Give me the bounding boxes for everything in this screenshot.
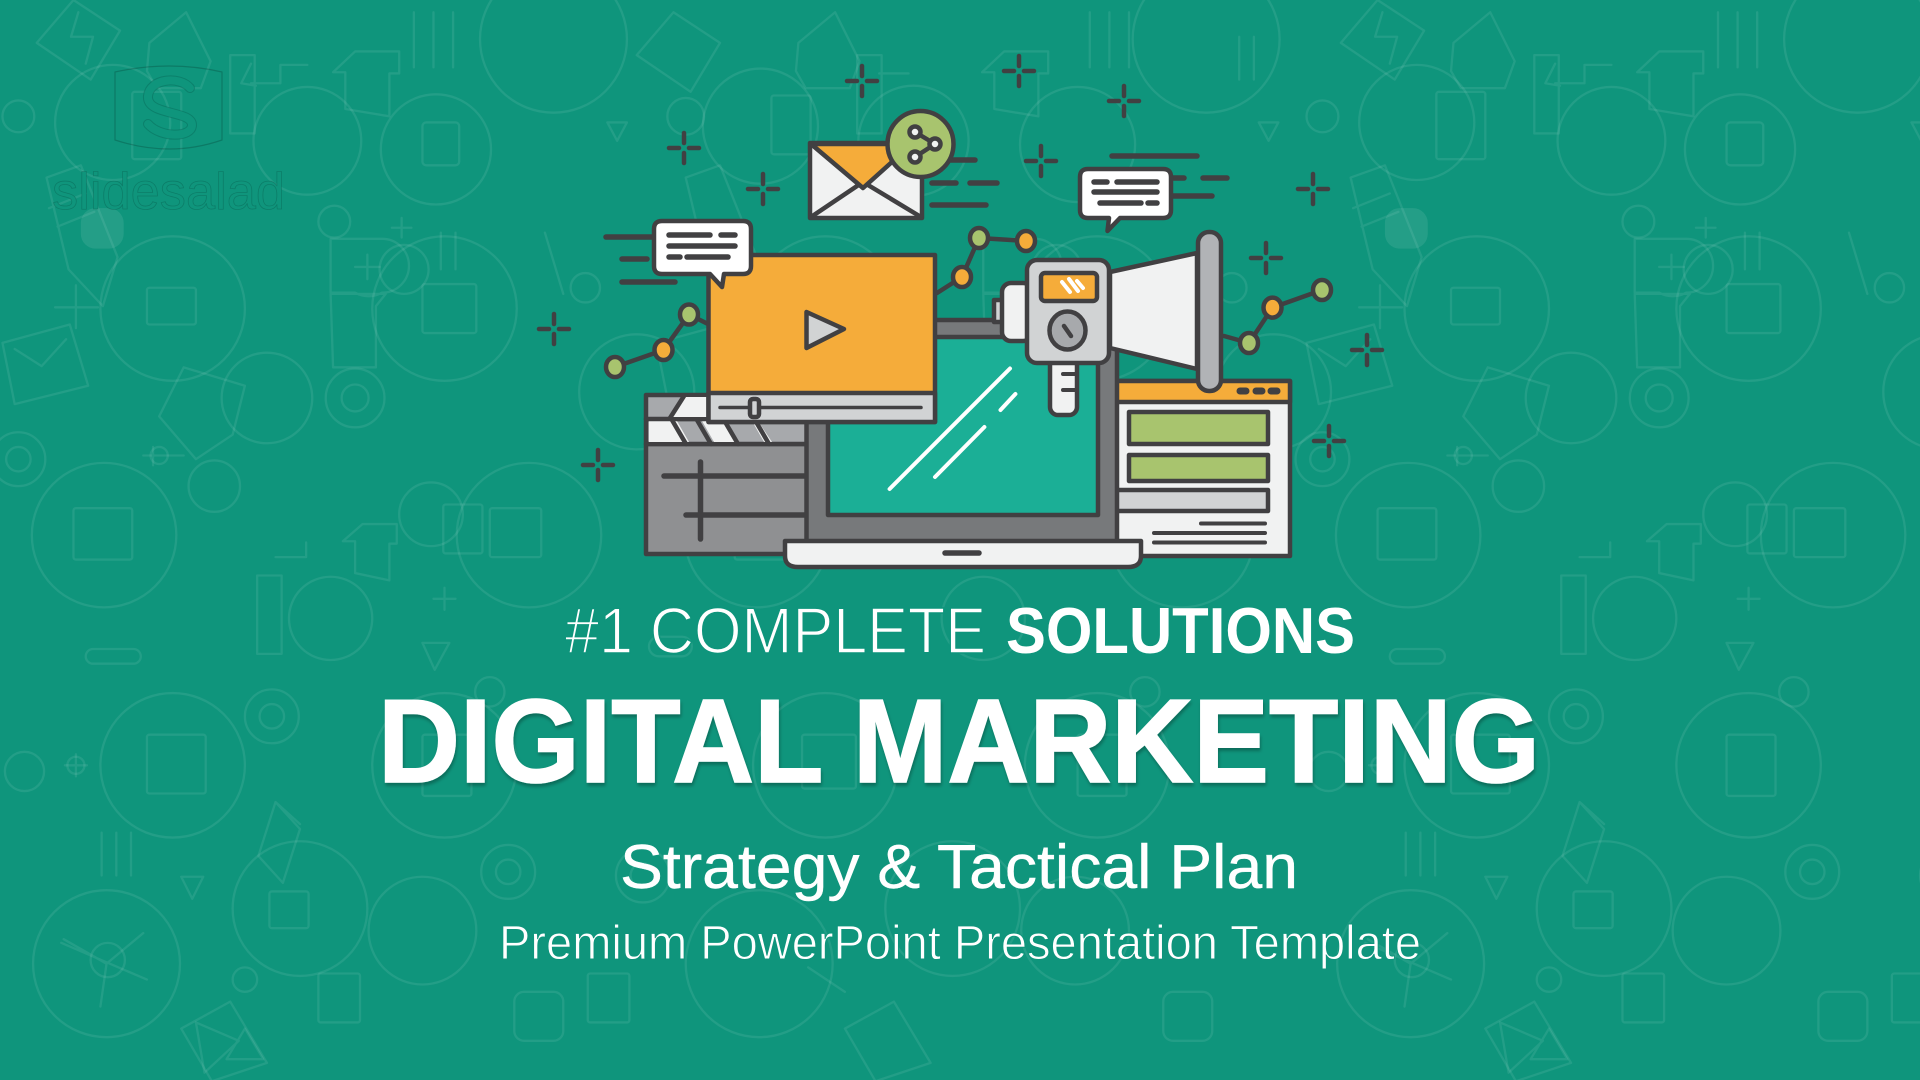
laptop base: [785, 541, 1141, 567]
headline: #1 complete solutions: #1 COMPLETE: [565, 594, 986, 667]
video player: [708, 255, 935, 422]
subtitle: strategy and tactical plan: Strategy & Tactical Plan: [620, 833, 1298, 902]
watermark logo: slidesalad: slidesalad: [52, 163, 285, 221]
browser window: [1100, 381, 1290, 556]
share icon: [888, 111, 954, 177]
sparkle decorations: [539, 56, 1382, 480]
watermark logo: slidesalad: [52, 66, 285, 221]
speech bubble left: [654, 221, 751, 287]
illustration: digital marketing: [539, 56, 1382, 567]
motion lines: [606, 156, 1227, 282]
speech bubble right: [1080, 169, 1171, 231]
chart: right line: [1224, 280, 1331, 353]
tagline: premium powerpoint presentation template: Premium PowerPoint Presentation Template: [499, 917, 1421, 970]
headline: #1 complete solutions: SOLUTIONS: [1006, 594, 1355, 667]
laptop: [785, 320, 1141, 567]
chart: left line: [606, 304, 710, 377]
megaphone: [994, 232, 1221, 415]
play icon: [806, 312, 844, 348]
headline: #1 complete solutions: [565, 594, 1355, 667]
chart: middle line: [937, 228, 1035, 293]
title: digital marketing: DIGITAL MARKETING: [378, 675, 1540, 808]
clapperboard: [646, 395, 816, 554]
envelope: [810, 143, 922, 218]
